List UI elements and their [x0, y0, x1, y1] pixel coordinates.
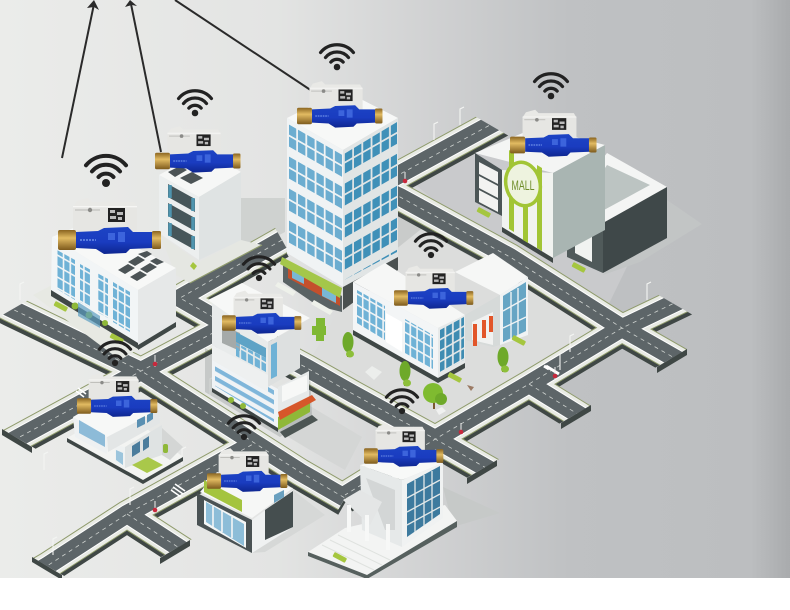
water meter: house — [77, 373, 157, 417]
wifi icon: central offices — [415, 234, 447, 258]
big tree — [423, 383, 447, 409]
wifi icon: tower — [321, 45, 353, 70]
building: centre-left block with orange awning — [205, 283, 318, 438]
crosswalks, lamps and signs — [20, 107, 651, 555]
road network — [0, 118, 687, 578]
water meter: left office — [58, 198, 161, 254]
water meter: centre-left block — [222, 291, 301, 334]
building: solar roof block — [159, 150, 262, 283]
bank portico columns — [343, 490, 390, 550]
wifi icon: shop — [228, 416, 260, 440]
building: bank with portico — [308, 454, 457, 579]
building: modern house — [67, 392, 183, 484]
building: glass tower — [275, 90, 398, 315]
mall sign — [501, 159, 545, 209]
water meter: shop — [207, 448, 287, 492]
solar panels — [118, 251, 164, 281]
cube tree — [312, 318, 326, 341]
water meter: mall — [510, 110, 597, 157]
mall sign: MALL — [512, 177, 535, 193]
arrows — [62, 0, 312, 158]
water meter: solar block — [155, 126, 240, 173]
road end faces — [2, 349, 687, 580]
water meter: central offices — [394, 266, 473, 309]
wifi icon: house — [99, 342, 131, 366]
building: central offices — [353, 253, 528, 383]
wifi icon: solar block — [179, 91, 211, 116]
tower shop front and awning — [275, 257, 342, 315]
white bottom band — [0, 578, 790, 610]
building: mall — [475, 127, 667, 273]
building: left office with solar panels — [33, 222, 176, 360]
wifi icon: centre-left block — [243, 257, 275, 281]
road end cuts — [0, 99, 720, 592]
water meter: tower — [297, 81, 382, 128]
ground plazas and shadows — [241, 142, 702, 553]
water meter: bank — [364, 424, 443, 467]
wifi icon: left office — [86, 156, 126, 187]
wifi icon: bank — [386, 390, 418, 414]
building: green-roof shop — [197, 472, 293, 553]
plaza trees and benches — [245, 318, 509, 415]
wifi icon: mall — [535, 74, 567, 99]
